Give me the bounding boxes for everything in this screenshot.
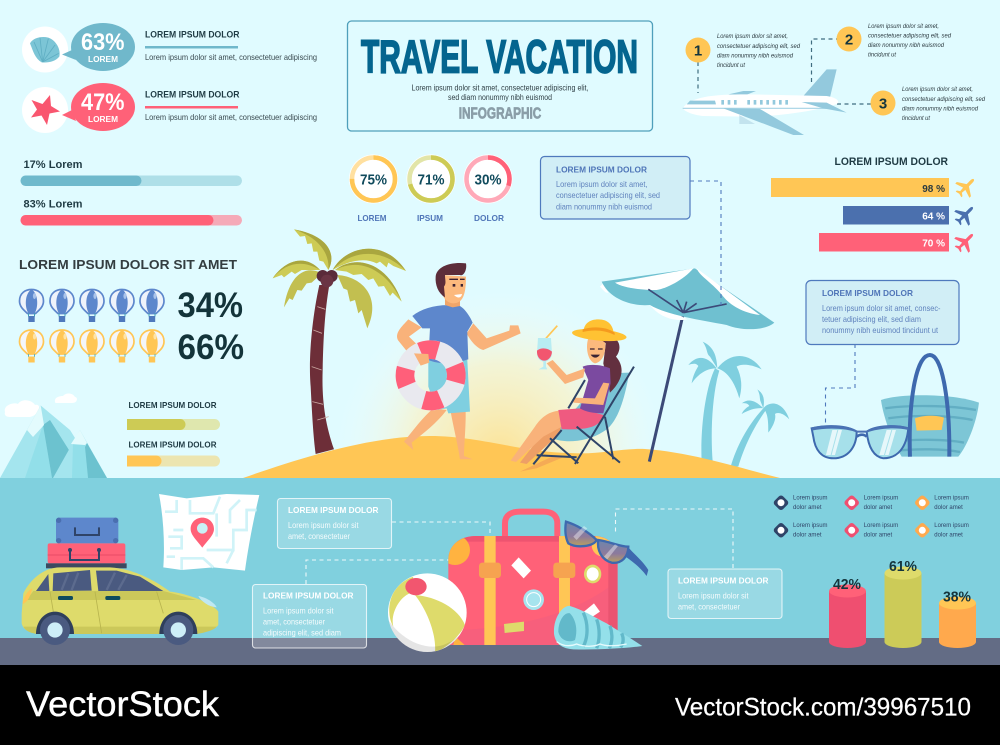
suitcase: [440, 512, 618, 645]
translucent callout 1: amet, consectetuer: [288, 531, 350, 541]
callout 2: 2: [845, 32, 853, 48]
subtitle text: [412, 84, 588, 102]
donut chart: 71% Ipsum: IPSUM: [417, 213, 443, 223]
translucent callout 3: LOREM IPSUM DOLOR: [678, 576, 768, 586]
deck chair: [553, 373, 629, 441]
translucent callout 1: [278, 498, 490, 548]
callout 2: tincidunt ut: [868, 52, 897, 58]
roof rack: [46, 563, 127, 568]
small progress bars: [127, 400, 220, 466]
callout 1: Lorem ipsum dolor sit amet,: [717, 33, 788, 40]
callout 1: diam nonummy nibh euismod: [717, 52, 793, 60]
cylinder chart: [829, 558, 976, 648]
blue callout: bag and sunglasses: Lorem ipsum dolor sit amet, consec-: [822, 303, 941, 313]
subtitle text: Lorem ipsum dolor sit amet, consectetuer adipiscing elit,: [412, 84, 588, 92]
sun hat: [572, 327, 627, 343]
icon: yellow plane: [952, 172, 981, 201]
translucent callout 2: adipiscing elit, sed diam: [263, 628, 341, 638]
footer bar: [0, 665, 1000, 745]
balloons: yellow row: [20, 330, 164, 362]
translucent callout 2: [252, 560, 450, 648]
blue callout: umbrella: diam nonummy nibh euismod: [556, 202, 652, 212]
woman on deck chair: [511, 319, 634, 472]
blue callout: bag and sunglasses: tetuer adipiscing elit, sed diam: [822, 314, 921, 324]
legend grid: Lorem ipsum: [793, 523, 828, 529]
blue callout: umbrella: LOREM IPSUM DOLOR: [556, 164, 647, 174]
red suitcase: [48, 543, 125, 563]
sea band: [0, 478, 1000, 638]
blue suitcase: [56, 518, 118, 543]
small progress bars: LOREM IPSUM DOLOR: [128, 440, 216, 450]
icon: blue plane: [951, 200, 980, 229]
man legs: [404, 408, 447, 450]
car body: [22, 567, 218, 633]
blue callout: umbrella: consectetuer adipiscing elit, sed: [556, 190, 660, 200]
background palms silhouette: [688, 342, 789, 467]
dashed connectors: [698, 39, 871, 104]
top: [580, 365, 611, 413]
legend grid: [773, 494, 969, 539]
seashell: [554, 606, 642, 649]
shirt: [412, 305, 473, 363]
legend grid: Lorem ipsum: [864, 496, 898, 502]
balloon pictogram chart: 66%: [178, 328, 244, 367]
balloon pictogram chart: 34%: [178, 286, 243, 325]
legend grid: Lorem ipsum: [864, 523, 898, 529]
footer bar: VectorStock.com/39967510: [675, 694, 971, 722]
text block: starfish stat description: Lorem ipsum dolor sit amet, consectetuer adipiscing: [145, 112, 317, 122]
legend grid: Lorem ipsum: [934, 523, 969, 529]
panel: shell stat 63%: LOREM: [88, 55, 118, 64]
legend grid: dolor amet: [864, 505, 893, 511]
callout 1: 1: [694, 42, 702, 60]
coconuts: [317, 270, 338, 287]
right arm: [467, 323, 521, 350]
translucent callout 3: Lorem ipsum dolor sit: [678, 590, 749, 600]
island: [243, 436, 780, 478]
text block: shell stat description: [145, 30, 317, 62]
callout 3: [870, 86, 985, 122]
title panel: [348, 21, 652, 131]
translucent callout 2: LOREM IPSUM DOLOR: [263, 590, 354, 600]
donut chart: 75% Lorem: 75%: [360, 172, 387, 188]
text block: starfish stat description: LOREM IPSUM DOLOR: [145, 90, 240, 100]
legend grid: dolor amet: [793, 505, 822, 511]
panel: starfish stat 47%: [22, 83, 135, 133]
translucent callout 3: amet, consectetuer: [678, 602, 740, 612]
panel: shell stat 63%: [22, 23, 135, 72]
blue callout: bag and sunglasses: LOREM IPSUM DOLOR: [822, 288, 913, 298]
right horizontal bar chart: 98 %: [922, 184, 945, 195]
right horizontal bar chart: LOREM IPSUM DOLOR: [834, 156, 948, 168]
progress bar: 17% Lorem: 17% Lorem: [24, 159, 83, 171]
legend grid: dolor amet: [934, 505, 963, 511]
translucent callout 2: amet, consectetuer: [263, 616, 325, 626]
cylinder: 38%: 38%: [943, 588, 971, 606]
deck chair frame: [533, 367, 634, 464]
sunglasses: [812, 425, 908, 458]
neck and head: [445, 295, 460, 307]
icon: scallop shell: [30, 37, 60, 62]
beach umbrella: [600, 268, 774, 462]
front wheel: [159, 612, 197, 645]
legend grid: dolor amet: [864, 532, 893, 538]
beach ball: [388, 573, 467, 657]
donut chart: 30% Dolor: 30%: [474, 172, 502, 188]
text block: shell stat description: Lorem ipsum dolor sit amet, consectetuer adipiscing: [145, 52, 317, 62]
callout 2: consectetuer adipiscing elit, sed: [868, 32, 951, 40]
callout 2: diam nonummy nibh euismod: [868, 42, 944, 49]
callout 3: consectetuer adipiscing elit, sed: [902, 96, 985, 103]
progress bar: 83% Lorem: [20, 198, 242, 226]
blue callout: bag and sunglasses: [806, 280, 959, 423]
callout 3: 3: [879, 96, 887, 112]
right horizontal bar chart: 70 %: [922, 238, 945, 250]
text block: shell stat description: LOREM IPSUM DOLOR: [145, 30, 240, 40]
right horizontal bar chart: 64 %: [922, 212, 945, 222]
couple on beach: [397, 263, 634, 472]
legend grid: dolor amet: [934, 532, 963, 538]
balloon pictogram chart: LOREM IPSUM DOLOR SIT AMET: [19, 257, 237, 272]
small progress bars: LOREM IPSUM DOLOR: [128, 400, 216, 410]
donut chart: 30% Dolor: DOLOR: [474, 213, 504, 223]
right horizontal bar chart: [771, 156, 981, 256]
text block: starfish stat description: [145, 90, 317, 122]
palm fronds: [273, 229, 406, 328]
skirt: [558, 408, 603, 429]
icon: starfish: [31, 95, 60, 125]
callout 3: diam nonummy nibh euismod: [902, 106, 978, 112]
cylinder: 61%: [884, 558, 922, 648]
callout 1: [686, 33, 800, 69]
callout 3: tincidunt ut: [902, 115, 931, 122]
subtitle text: sed diam nonummy nibh euismod: [448, 93, 552, 102]
mountains and clouds: [0, 393, 107, 478]
rear wheel: [36, 612, 74, 645]
man with lifebuoy: [397, 263, 521, 459]
car with luggage: [22, 518, 218, 645]
road: [0, 638, 1000, 665]
footer bar: VectorStock: [26, 685, 220, 724]
donut chart: 71% Ipsum: 71%: [418, 172, 444, 188]
face: [587, 338, 605, 363]
callout 1: tincidunt ut: [717, 62, 746, 69]
cylinder: 42%: [829, 576, 866, 648]
arms: [547, 360, 585, 384]
translucent callout 1: Lorem ipsum dolor sit: [288, 520, 359, 530]
lifebuoy: [403, 348, 458, 403]
map pin: [191, 518, 214, 548]
sunglasses on suitcase: [565, 522, 648, 576]
icon: airplane: [683, 69, 847, 135]
sun glow: [335, 290, 665, 620]
donut chart: 75% Lorem: [349, 154, 398, 223]
donut chart: 75% Lorem: LOREM: [358, 213, 386, 223]
sky background: [0, 0, 1000, 480]
translucent callout 1: LOREM IPSUM DOLOR: [288, 505, 378, 515]
callout 1: consectetuer adipiscing elit, sed: [717, 43, 800, 50]
cocktail: [546, 326, 557, 338]
legs: [520, 422, 562, 464]
callout 3: Lorem ipsum dolor sit amet,: [902, 86, 973, 93]
panel: starfish stat 47%: LOREM: [88, 115, 118, 124]
map with pin: [159, 494, 259, 571]
callout 2: [836, 23, 951, 58]
cylinder: 38%: [939, 588, 976, 648]
balloon pictogram chart: [19, 257, 244, 367]
legend grid: Lorem ipsum: [793, 496, 828, 502]
hair: [436, 263, 466, 297]
translucent callout 3: [616, 509, 782, 618]
hair back: [603, 337, 622, 393]
translucent callout 2: Lorem ipsum dolor sit: [263, 606, 334, 616]
balloons: blue row: [20, 290, 164, 322]
progress bar: 83% Lorem: 83% Lorem: [24, 198, 83, 210]
legend grid: Lorem ipsum: [934, 496, 969, 502]
progress bar: 17% Lorem: [20, 159, 242, 186]
infographic label: INFOGRAPHIC: [459, 106, 541, 122]
left upper arm: [397, 319, 427, 363]
title: TRAVEL VACATION: [361, 30, 638, 82]
palm trunk: [310, 285, 334, 454]
donut chart: 71% Ipsum: [406, 154, 456, 223]
blue callout: bag and sunglasses: nonummy nibh euismod tincidunt ut: [822, 325, 939, 335]
airplane with numbered callouts: [683, 23, 985, 135]
beach bag: [881, 355, 979, 457]
blue callout: umbrella: [540, 156, 721, 305]
callout 2: Lorem ipsum dolor sit amet,: [868, 23, 939, 30]
shorts: [428, 360, 470, 413]
panel: shell stat 63%: 63%: [81, 29, 124, 56]
cylinder: 61%: 61%: [889, 558, 917, 575]
donut chart: 30% Dolor: [464, 154, 512, 223]
legend grid: dolor amet: [793, 532, 822, 538]
cylinder: 42%: 42%: [833, 576, 861, 593]
blue callout: umbrella: Lorem ipsum dolor sit amet,: [556, 179, 648, 189]
coconut palm tree: [273, 229, 406, 454]
hand on lifebuoy: [414, 353, 429, 366]
panel: starfish stat 47%: 47%: [81, 89, 124, 116]
icon: red plane: [951, 227, 980, 256]
